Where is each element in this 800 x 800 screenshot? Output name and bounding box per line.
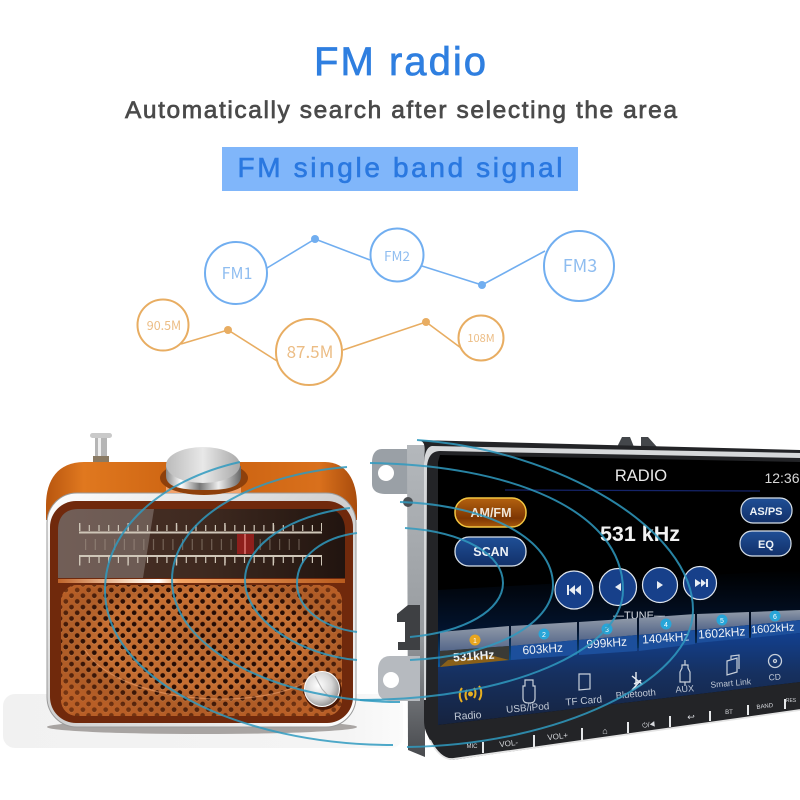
node: FM1: FM1 <box>222 260 252 284</box>
icon: smart link <box>727 655 739 675</box>
hardware buttons: ⌂ <box>602 726 608 736</box>
title: FM radio <box>314 40 486 84</box>
chart: frequency network <box>138 300 504 385</box>
source menu: Bluetooth <box>615 687 656 702</box>
preset tiles: 1404kHz <box>642 629 690 647</box>
preset tiles: 1 <box>473 638 477 645</box>
illustration: car head unit <box>372 437 800 760</box>
preset tiles: 999kHz <box>586 635 628 651</box>
icon: CD <box>768 654 782 668</box>
preset tiles: 6 <box>773 614 777 621</box>
icon: TF card <box>579 674 590 690</box>
node: FM2 <box>370 228 424 282</box>
button: AS/PS <box>741 498 792 523</box>
icon: bluetooth <box>632 672 642 690</box>
top clips <box>617 437 657 447</box>
source menu: CD <box>768 671 781 683</box>
antenna <box>90 433 112 462</box>
source menu: Radio <box>454 709 482 723</box>
button: EQ: EQ <box>758 539 774 551</box>
source menu: USB/iPod <box>506 701 550 716</box>
lower mounting bracket <box>378 656 420 701</box>
frequency readout: 531 kHz <box>600 522 680 546</box>
node: 90.5M: 90.5M <box>147 315 181 334</box>
screen heading: RADIO <box>615 467 667 485</box>
preset tiles <box>440 610 800 667</box>
volume knob <box>304 672 342 710</box>
source menu: TF Card <box>565 694 603 709</box>
preset tiles: 1602kHz <box>698 624 746 642</box>
tune label: —TUNE— <box>613 610 665 622</box>
radio face frame <box>47 493 356 727</box>
side rail <box>407 445 425 757</box>
signal waves <box>105 440 693 747</box>
hardware buttons: ⏻/◀ <box>642 720 656 730</box>
icon: AUX <box>680 660 690 686</box>
button: SCAN: SCAN <box>473 545 509 559</box>
node: FM3: FM3 <box>563 252 597 278</box>
chart: FM bands network <box>205 228 614 304</box>
button: AM/FM <box>455 498 526 527</box>
icon: radio waves <box>460 686 481 702</box>
preset tiles: 1602kHz <box>751 622 795 637</box>
illustration: retro radio <box>46 433 357 734</box>
hardware buttons: ↩ <box>687 712 695 722</box>
preset tiles: 3 <box>605 627 609 634</box>
button: EQ <box>740 531 791 556</box>
preset tiles: 2 <box>542 632 546 639</box>
screen <box>438 455 800 725</box>
button: AM/FM: AM/FM <box>471 506 511 520</box>
dial window <box>58 509 345 578</box>
node: 90.5M <box>138 300 188 350</box>
side connectors <box>397 605 420 650</box>
hardware buttons: BAND <box>756 703 774 711</box>
hardware buttons: BT <box>725 710 733 716</box>
hardware buttons: VOL+ <box>547 731 569 742</box>
node: FM1 <box>205 242 267 304</box>
node: 108M <box>458 316 504 360</box>
preset tiles: 4 <box>664 622 668 629</box>
preset tiles: 531kHz <box>453 648 495 664</box>
top mounting bracket <box>372 449 414 494</box>
floor shadow <box>3 694 403 748</box>
radio top casing <box>46 462 357 520</box>
icon: USB <box>523 680 535 703</box>
node: 87.5M <box>276 319 342 385</box>
hardware buttons <box>466 698 797 753</box>
source menu <box>454 654 782 723</box>
banner: FM single band signal <box>222 147 578 191</box>
tuner needle <box>237 534 254 554</box>
source menu: Smart Link <box>710 676 752 690</box>
subtitle: Automatically search after selecting the area <box>125 97 677 124</box>
button: AS/PS: AS/PS <box>749 506 783 518</box>
hardware buttons: VOL- <box>499 738 519 749</box>
node: 87.5M: 87.5M <box>287 338 333 363</box>
node: FM3 <box>544 231 614 301</box>
hardware buttons: RES <box>786 698 797 704</box>
preset tiles: 603kHz <box>522 641 564 657</box>
preset tiles: 5 <box>720 618 724 625</box>
button: SCAN <box>455 537 526 566</box>
menu background <box>438 633 800 725</box>
source menu: AUX <box>675 683 694 695</box>
tuning dial cap <box>160 447 248 495</box>
bezel <box>417 440 800 760</box>
banner: FM single band signal: FM single band signal <box>238 152 562 183</box>
tuning controls <box>555 566 716 609</box>
speaker grille <box>61 585 342 716</box>
node: 108M: 108M <box>467 330 495 346</box>
clock: 12:36 <box>764 470 800 486</box>
node: FM2: FM2 <box>384 245 410 265</box>
hardware buttons: MIC <box>466 744 478 750</box>
